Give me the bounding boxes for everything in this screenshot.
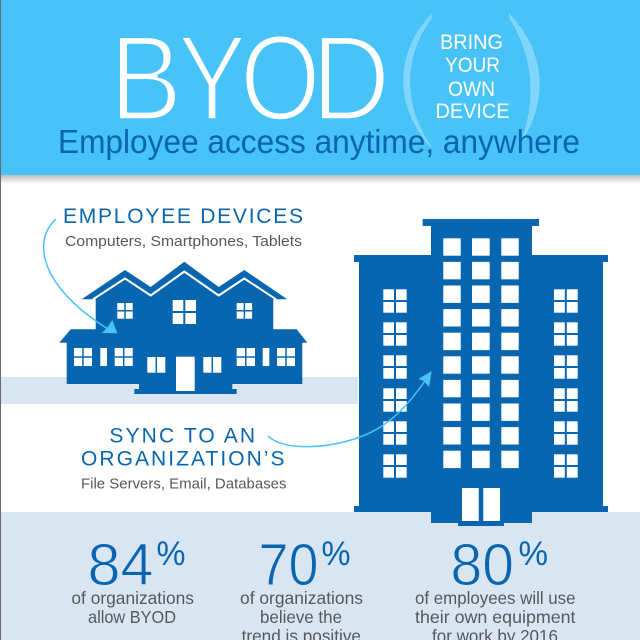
tower windows — [443, 238, 519, 468]
stat: 70 percent: believe the — [260, 607, 342, 627]
arrow: sync to building — [268, 371, 432, 447]
text: bring your own device: OWN — [448, 78, 495, 101]
heading: employee devices: EMPLOYEE DEVICES — [63, 205, 303, 228]
icon: right parenthesis — [510, 15, 539, 138]
title: BYOD: D — [312, 10, 390, 146]
text: bring your own device: YOUR — [445, 54, 500, 77]
icon: left parenthesis — [404, 15, 431, 147]
wing window mullions — [383, 289, 578, 478]
stat: 70 percent: 70 — [258, 532, 318, 598]
arrow: devices to house — [44, 219, 117, 333]
subtitle: Employee access anytime, anywhere — [58, 123, 580, 160]
stat: 80 percent — [415, 532, 576, 640]
heading: sync to an organization's — [81, 425, 284, 470]
title: BYOD: O — [240, 10, 321, 146]
stat: 80 percent: their own equipment — [415, 607, 576, 627]
text: bring your own device: BRING — [440, 31, 503, 54]
building silhouette — [354, 219, 608, 526]
stat: 84 percent: of organizations — [71, 588, 194, 608]
window mullions — [74, 300, 295, 373]
heading: sync to an organization's: SYNC TO AN — [109, 425, 255, 448]
house silhouette — [59, 262, 307, 394]
stat: 70 percent — [240, 532, 363, 640]
text: bring your own device — [436, 31, 510, 123]
stat: 80 percent: of employees will use — [415, 588, 576, 608]
title: BYOD: Y — [178, 10, 246, 146]
text: bring your own device: DEVICE — [436, 100, 510, 123]
stat: 70 percent: of organizations — [240, 588, 363, 608]
house windows — [74, 300, 295, 391]
stat: 80 percent: % — [518, 535, 548, 573]
title: BYOD: B — [110, 10, 182, 146]
stat: 70 percent: % — [322, 535, 350, 573]
panel: statistics background — [0, 512, 640, 640]
icon: office building — [354, 219, 608, 526]
stat: 84 percent: 84 — [88, 532, 154, 598]
roof highlight — [93, 272, 276, 299]
heading: sync to an organization's: ORGANIZATION’S — [81, 447, 284, 470]
stat: 80 percent: 80 — [450, 532, 514, 598]
wing windows — [383, 289, 578, 478]
building doors — [462, 488, 500, 521]
panel: header — [1, 0, 640, 175]
stat: 84 percent: allow BYOD — [88, 607, 176, 627]
ground band behind house — [0, 377, 358, 404]
icon: house — [59, 262, 307, 394]
text: device types: Computers, Smartphones, Tablets — [65, 234, 302, 250]
title: BYOD — [110, 10, 390, 146]
stat: 84 percent: % — [156, 535, 186, 573]
stat: 84 percent — [71, 532, 194, 627]
text: organization resources: File Servers, Email, Databases — [81, 476, 286, 492]
